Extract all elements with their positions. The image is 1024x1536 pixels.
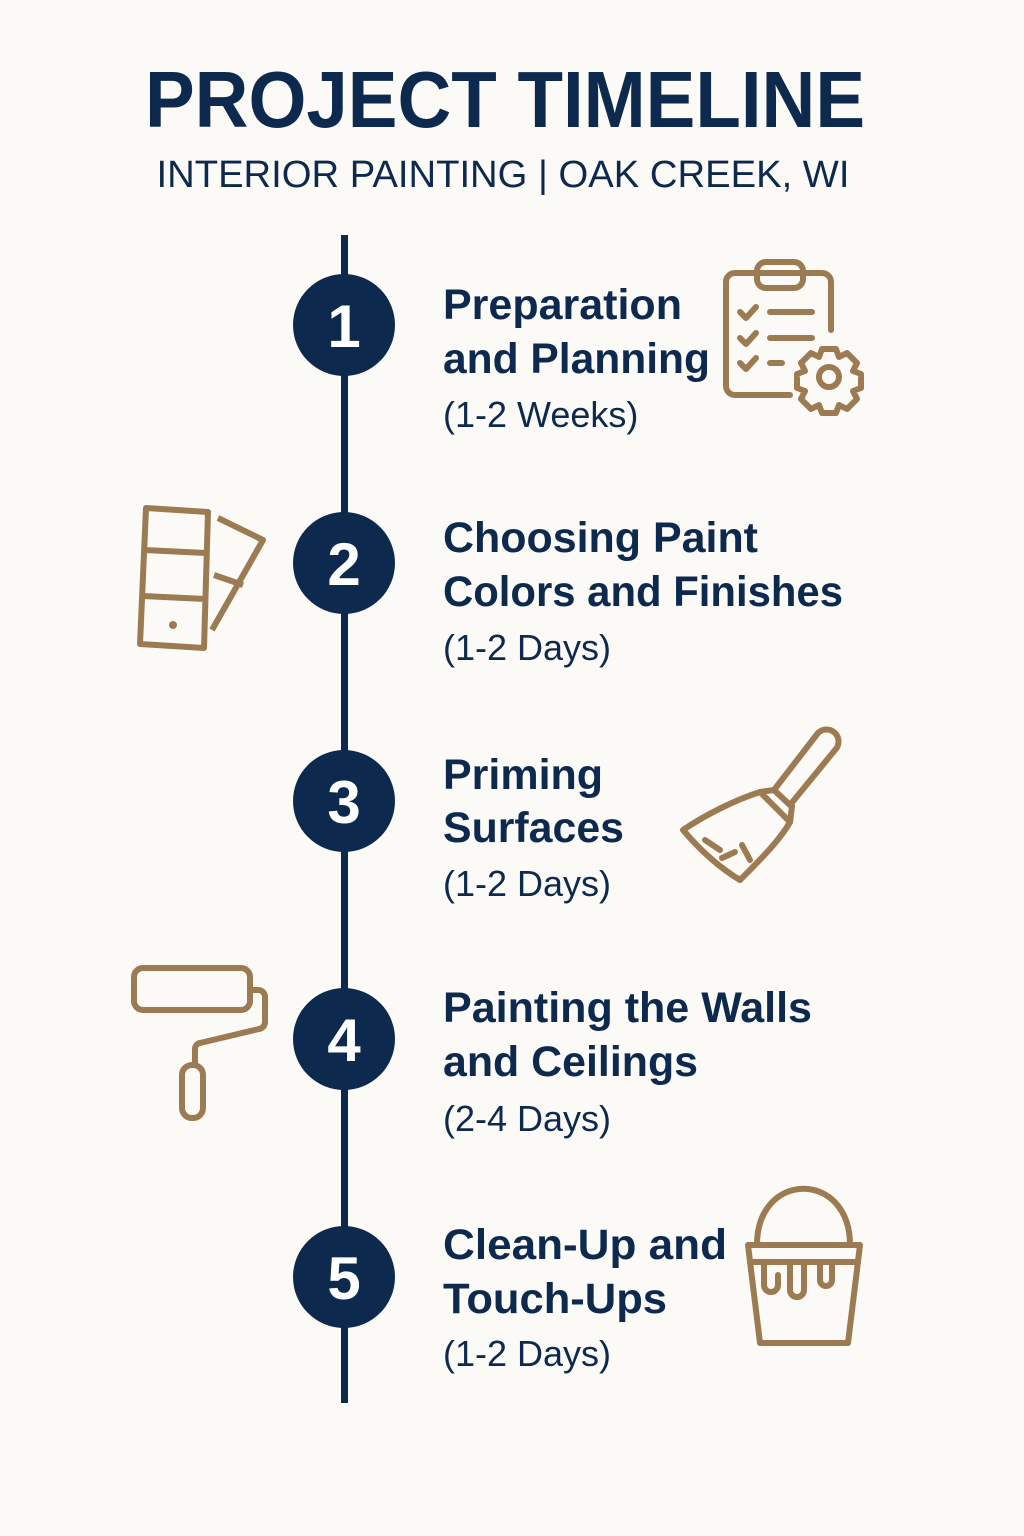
icon: paint roller [134, 968, 265, 1118]
icon: color swatches [140, 508, 263, 648]
step 3: Surfaces [443, 804, 624, 852]
step 4: Painting the Walls [443, 984, 812, 1032]
step 3: (1-2 Days) [443, 863, 611, 904]
step 2 [293, 512, 843, 668]
step 4: and Ceilings [443, 1038, 698, 1086]
icon: paint bucket [748, 1189, 860, 1343]
timeline line [341, 235, 348, 1403]
step 1: 1 [327, 293, 361, 360]
step 5 [293, 1221, 727, 1374]
step 1: Preparation [443, 281, 682, 329]
icon: paintbrush [683, 729, 839, 880]
step 4 [293, 984, 812, 1139]
step 4: 4 [327, 1007, 361, 1074]
step 4: (2-4 Days) [443, 1098, 611, 1139]
step 5: (1-2 Days) [443, 1333, 611, 1374]
icon: clipboard with gear [726, 262, 861, 413]
step 5: Clean-Up and [443, 1221, 727, 1269]
step 3: Priming [443, 751, 603, 799]
step 3 [293, 750, 624, 904]
step 3: 3 [327, 769, 361, 836]
step 1: (1-2 Weeks) [443, 394, 638, 435]
step 2: (1-2 Days) [443, 627, 611, 668]
step 2: 2 [327, 531, 361, 598]
step 2: Colors and Finishes [443, 568, 843, 616]
step 1 [293, 274, 710, 435]
step 2: Choosing Paint [443, 514, 758, 562]
step 5: 5 [327, 1245, 361, 1312]
subtitle: INTERIOR PAINTING | OAK CREEK, WI [156, 154, 850, 196]
step 1: and Planning [443, 335, 710, 383]
step 5: Touch-Ups [443, 1275, 667, 1323]
title: PROJECT TIMELINE [145, 55, 865, 144]
